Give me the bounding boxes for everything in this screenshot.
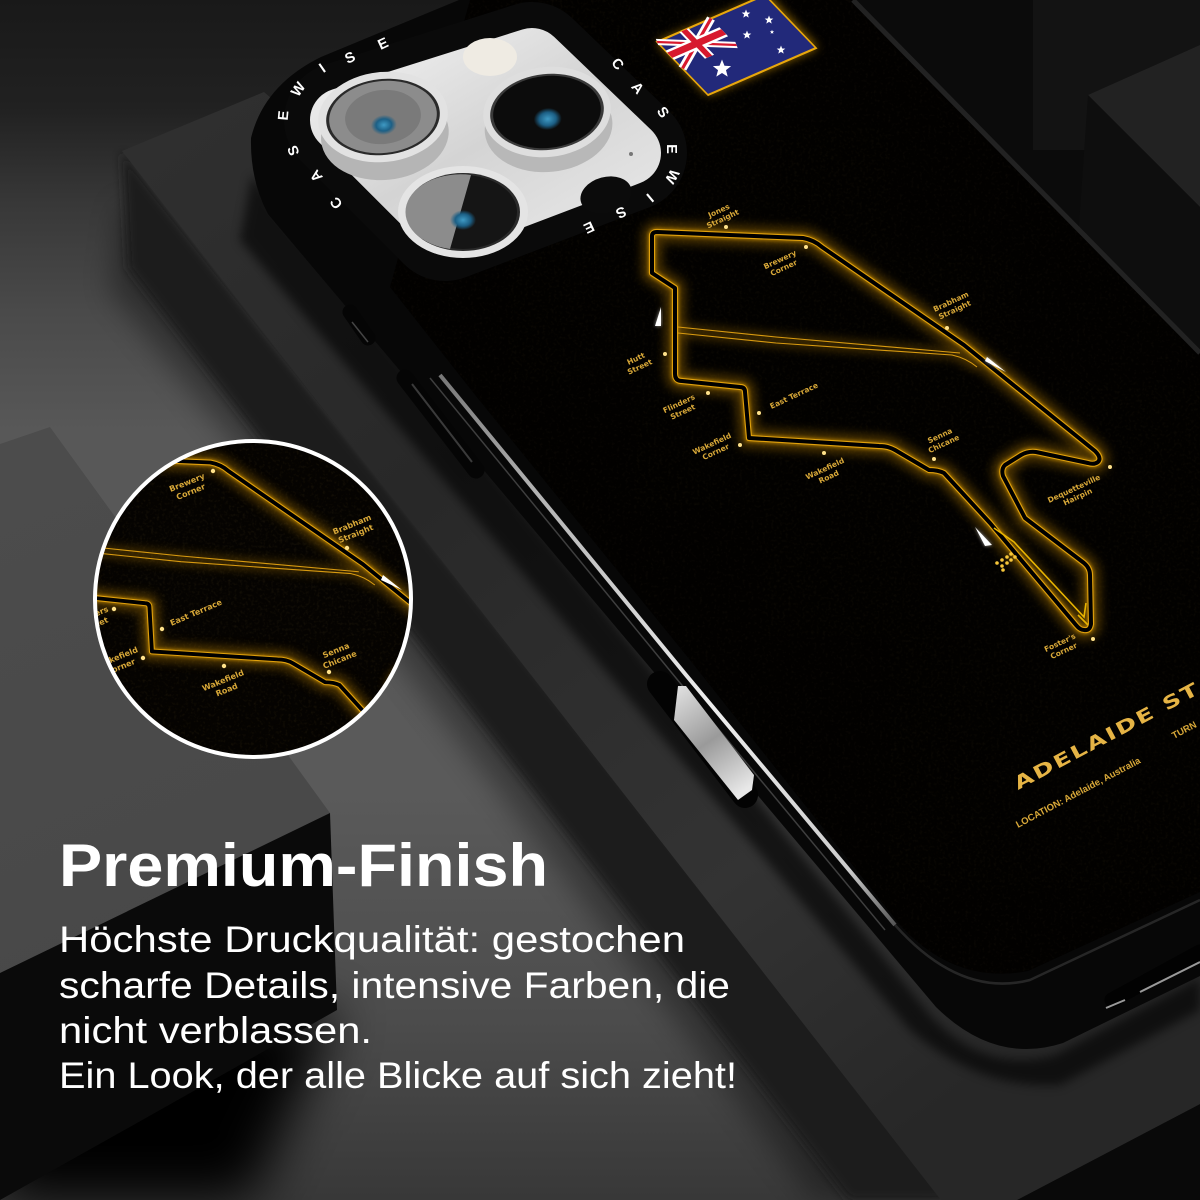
side button long xyxy=(405,378,476,470)
ring text right: W xyxy=(661,166,682,186)
inset labels: Flinders xyxy=(72,605,110,627)
upper right dark backdrop xyxy=(820,0,1200,400)
start finish inner lines xyxy=(994,528,1088,625)
ring text right: C xyxy=(608,55,627,74)
circuit location: LOCATION: Adelaide, Australia xyxy=(1014,755,1143,831)
ring text left: A xyxy=(307,166,326,185)
corner labels xyxy=(622,199,1106,662)
lens 2 xyxy=(479,61,617,178)
corner labels: Hairpin xyxy=(1062,486,1094,507)
corner labels: Dequetteville xyxy=(1046,473,1102,505)
microphone xyxy=(629,152,633,156)
corner labels: Brewery xyxy=(762,248,798,271)
camera control recess xyxy=(660,684,745,795)
ring text left: I xyxy=(316,61,329,76)
screen grain texture xyxy=(564,1,1198,912)
inset labels: Brabham xyxy=(332,513,373,536)
direction arrow 2 xyxy=(985,357,1006,372)
description text: nicht verblassen. xyxy=(59,1009,372,1051)
ring text right xyxy=(581,55,682,236)
flag stars xyxy=(713,10,785,77)
floor shadow xyxy=(0,1010,340,1200)
corner labels: Street xyxy=(626,357,654,377)
racetrack xyxy=(622,199,1112,662)
bump silver glass xyxy=(342,60,629,223)
inset border xyxy=(95,441,411,757)
phone screen xyxy=(390,0,1200,974)
flash xyxy=(463,38,517,76)
secondary gloss line xyxy=(430,378,885,930)
corner labels: Straight xyxy=(705,207,741,230)
inset labels xyxy=(98,474,374,696)
corner labels: Corner xyxy=(701,442,731,462)
inset labels: Corner xyxy=(105,657,137,677)
corner labels: Street xyxy=(669,402,697,422)
ring text right: I xyxy=(643,190,656,204)
soft shadow under main block xyxy=(106,222,844,1200)
ring text right: A xyxy=(628,79,647,98)
direction arrow 3 xyxy=(975,527,992,546)
circuit name: ADELAIDE ST xyxy=(1011,679,1200,794)
corner labels: Flinders xyxy=(662,392,697,415)
ring text left: E xyxy=(276,110,292,121)
inset arrow xyxy=(381,575,402,590)
ring text right: S xyxy=(653,104,672,122)
camera control silver button xyxy=(674,686,754,800)
phone shadow xyxy=(240,175,1200,1085)
checkered start flag xyxy=(995,552,1017,572)
magnified inset circle xyxy=(93,439,413,759)
flag of Australia xyxy=(657,0,818,95)
circuit turns: TURN xyxy=(1170,719,1199,742)
corner labels: Road xyxy=(817,468,840,485)
ring text right: S xyxy=(613,202,628,221)
description text: Ein Look, der alle Blicke auf sich zieht! xyxy=(59,1054,737,1096)
inset labels: Senna xyxy=(321,641,351,660)
inset labels: Road xyxy=(215,681,239,698)
inset track xyxy=(97,448,409,720)
inset labels: Corner xyxy=(175,482,207,502)
lens 1 xyxy=(314,65,454,186)
lower step top face xyxy=(0,427,330,973)
glossy edge highlight xyxy=(440,375,895,925)
inset labels: Street xyxy=(80,615,110,634)
corner labels: Senna xyxy=(926,426,954,445)
inset labels: East Terrace xyxy=(169,597,224,628)
ring text left xyxy=(276,35,391,212)
corner gloss xyxy=(895,900,1200,984)
lens 3 xyxy=(398,166,528,258)
phone xyxy=(251,0,1200,1049)
corner labels: Wakefield xyxy=(691,431,733,457)
bottom port xyxy=(1106,952,1200,1008)
main block side face xyxy=(122,151,960,1200)
ring text right: E xyxy=(663,144,679,154)
camera bump xyxy=(276,35,682,258)
corner labels: Jones xyxy=(706,202,732,220)
ring text left: S xyxy=(285,143,303,158)
side button upper xyxy=(350,312,368,342)
ring text left: E xyxy=(376,35,391,54)
lidar xyxy=(576,171,636,219)
inset labels: Straight xyxy=(337,523,375,545)
lower step front face xyxy=(0,813,337,1200)
corner labels: Corner xyxy=(1049,641,1079,661)
corner dots xyxy=(663,225,1112,641)
inset labels: Brewery xyxy=(168,471,207,494)
corner labels: Corner xyxy=(769,258,799,278)
inset labels: Wakefield xyxy=(201,668,246,693)
ring text left: S xyxy=(343,49,358,68)
bump black frame xyxy=(342,60,629,223)
description text xyxy=(59,918,737,1096)
ring text left: W xyxy=(288,79,309,100)
inset dots xyxy=(112,469,349,674)
corner labels: Straight xyxy=(937,298,973,321)
inset labels: Chicane xyxy=(322,649,359,671)
ring text right: E xyxy=(581,217,596,236)
heading: Premium-Finish xyxy=(59,832,548,899)
inset labels: Wakefield xyxy=(95,645,140,670)
corner labels: East Terrace xyxy=(768,381,819,411)
ring text left: C xyxy=(327,193,346,212)
corner labels: Wakefield xyxy=(804,456,846,482)
inset grain xyxy=(100,444,404,754)
corner labels: Chicane xyxy=(927,433,961,455)
bottom right front face xyxy=(1017,1104,1200,1200)
direction arrow 1 xyxy=(655,307,661,326)
phone body xyxy=(251,0,1200,1049)
corner labels: Hutt xyxy=(626,351,647,367)
corner labels: Brabham xyxy=(932,290,970,314)
corner labels: Foster's xyxy=(1043,631,1078,654)
description text: scharfe Details, intensive Farben, die xyxy=(59,964,730,1006)
description text: Höchste Druckqualität: gestochen xyxy=(59,918,685,960)
screen right rim xyxy=(853,0,1200,353)
